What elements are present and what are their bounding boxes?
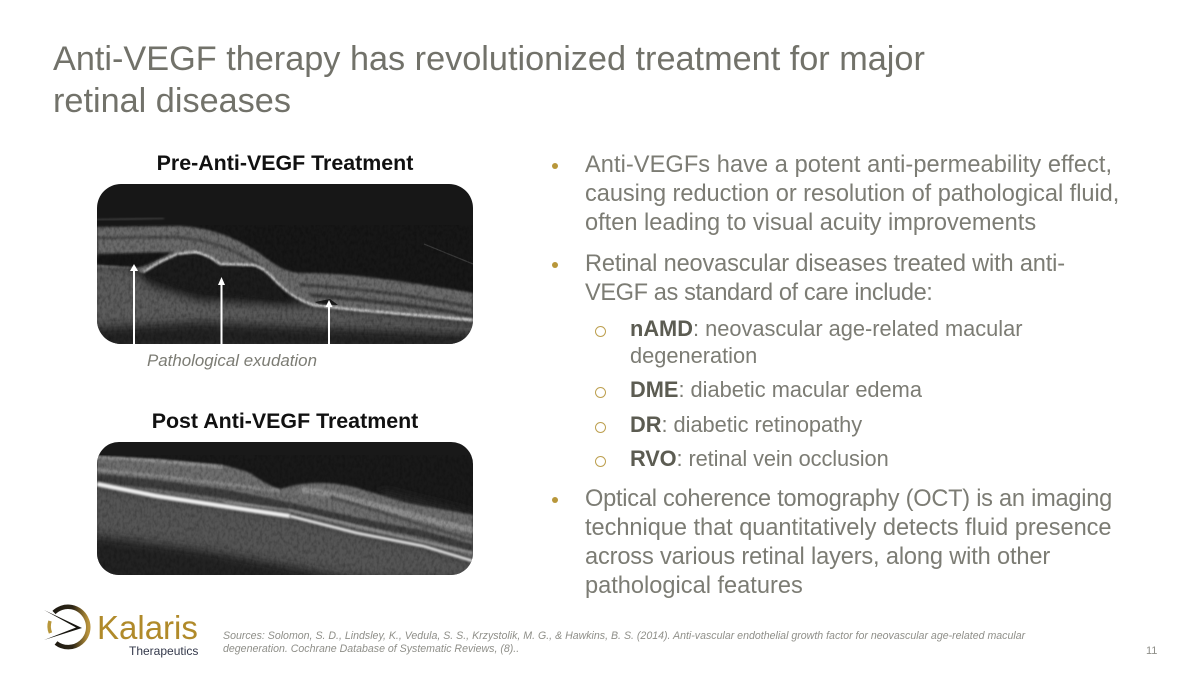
deep tissue [90, 262, 480, 350]
speckle [97, 455, 473, 575]
sub-bullet: nAMD [595, 316, 1023, 368]
bullet: anti-permeability [552, 152, 1119, 236]
retina layers [97, 457, 473, 558]
bullet: OCT: technique that quantitatively detects fluid presence [585, 515, 1112, 541]
title: retinal diseases [53, 82, 291, 120]
bullet: anti-permeability: causing reduction or resolution of pathological fluid, [585, 181, 1119, 207]
heading: post-treatment: Post Anti-VEGF Treatment [152, 409, 418, 433]
bullet: anti-permeability: Anti-VEGFs have a potent anti-permeability effect, [585, 152, 1112, 178]
wordmark: Kalaris [97, 609, 198, 646]
sub-bullet: nAMD: degeneration [630, 343, 757, 368]
bullet: OCT: pathological features [585, 573, 803, 599]
logo: Kalaris Therapeutics [44, 604, 198, 658]
deep tissue [90, 483, 480, 580]
speckle [97, 225, 473, 344]
bullet: OCT: across various retinal layers, along with other [585, 544, 1050, 570]
retina [97, 226, 473, 322]
OCT scan: post-treatment [97, 442, 473, 575]
bullet: OCT: Optical coherence tomography (OCT) is an imaging [585, 486, 1112, 512]
tagline: Therapeutics [129, 644, 198, 658]
sub-bullet: DR: DR: diabetic retinopathy [630, 412, 862, 437]
sub-bullet: nAMD: nAMD: neovascular age-related macular [630, 316, 1023, 341]
bright RPE line [97, 248, 172, 252]
caption: pathological exudation: Pathological exudation [147, 351, 317, 370]
OCT scan: pre-treatment [97, 184, 473, 344]
sources footnote: Sources: Solomon, S. D., Lindsley, K., Vedula, S. S., Krzystolik, M. G., & Hawkins, B. S. (2014). Anti-vascular endothelial growth factor for neovascular age-related macular [223, 630, 1025, 642]
fluid pockets [97, 252, 173, 269]
heading: pre-treatment: Pre-Anti-VEGF Treatment [157, 151, 413, 175]
logo mark [44, 604, 90, 650]
title [53, 40, 925, 120]
bullet: neovascular diseases: Retinal neovascular diseases treated with anti- [585, 251, 1065, 277]
bullet: OCT [552, 486, 1112, 599]
bullet: anti-permeability: often leading to visual acuity improvements [585, 210, 1036, 236]
bullet list [552, 152, 1119, 599]
bullet: neovascular diseases: VEGF as standard of care include: [585, 280, 932, 306]
title: Anti-VEGF therapy has revolutionized treatment for major [53, 40, 925, 78]
sub-bullet: DME: DME: diabetic macular edema [630, 377, 922, 402]
bright RPE band [97, 484, 290, 516]
bullet: neovascular diseases [552, 251, 1065, 306]
page number: 11 [1146, 645, 1157, 657]
arrows [133, 270, 135, 344]
sources footnote [223, 630, 1026, 655]
sub-bullet: RVO: RVO: retinal vein occlusion [630, 446, 889, 471]
sources footnote: degeneration. Cochrane Database of Systematic Reviews, (8).. [223, 643, 519, 655]
